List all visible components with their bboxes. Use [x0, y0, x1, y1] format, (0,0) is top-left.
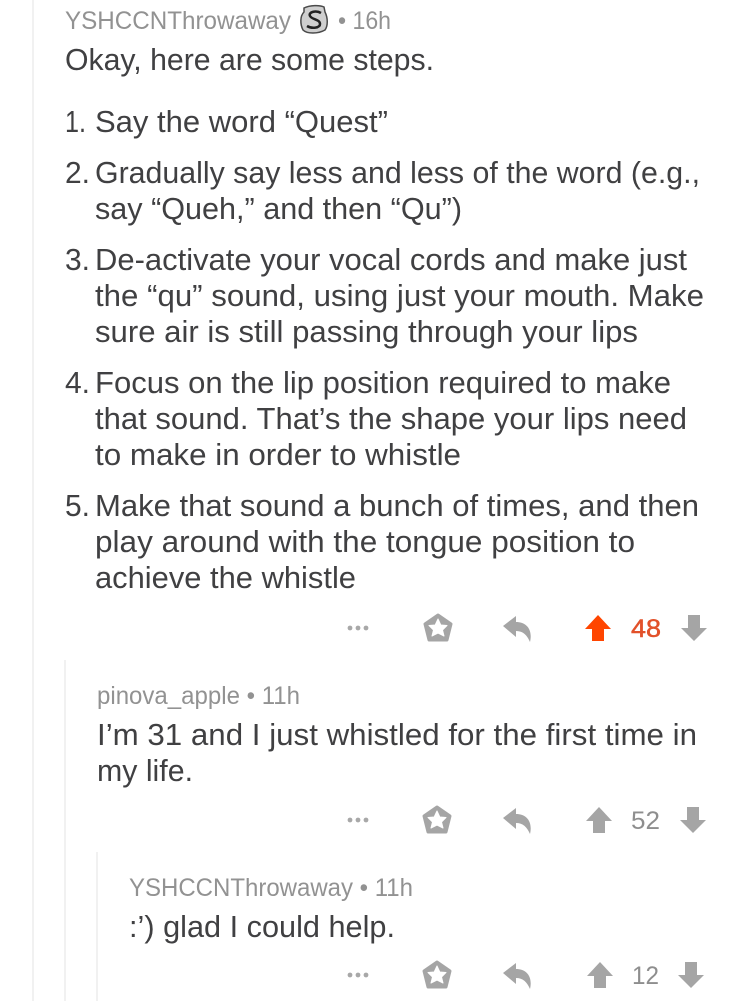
action bar: 48 votes: [348, 615, 707, 643]
thread lines: [32, 0, 98, 1001]
action bar: 52 votes: [348, 807, 706, 835]
step 3: 3.: [65, 242, 90, 277]
step 4: 4.: [65, 365, 90, 400]
action bar: 48 votes: 48: [631, 615, 661, 643]
author line: [65, 6, 391, 35]
step 5: Make that sound a bunch of times, and then: [95, 488, 699, 523]
comment text: I’m 31 and I just whistled for the first time in: [97, 717, 697, 752]
step 1: Say the word “Quest”: [95, 104, 388, 139]
step 3: [65, 242, 704, 349]
action bar: 12 votes: 12: [632, 962, 659, 990]
step 2: [65, 155, 700, 226]
step 5: play around with the tongue position to: [95, 524, 635, 559]
step 2: 2.: [65, 155, 90, 190]
top comment: [65, 6, 707, 643]
step 3: sure air is still passing through your lips: [95, 314, 638, 349]
icon: silver award badge: [301, 6, 327, 33]
step 3: De-activate your vocal cords and make just: [95, 242, 687, 277]
author line: YSHCCNThrowaway • 11h: [129, 874, 413, 902]
author line: pinova_apple • 11h: [97, 682, 300, 710]
intro text: Okay, here are some steps.: [65, 42, 434, 77]
author line: • 16h: [338, 7, 391, 35]
step 4: to make in order to whistle: [95, 437, 461, 472]
comment text: :’) glad I could help.: [129, 909, 395, 944]
comment text: my life.: [97, 753, 193, 788]
step 4: that sound. That’s the shape your lips need: [95, 401, 687, 436]
comment text: [97, 717, 697, 788]
step 1: 1.: [65, 104, 86, 139]
step 5: [65, 488, 699, 595]
step 3: the “qu” sound, using just your mouth. Make: [95, 278, 704, 313]
step 5: 5.: [65, 488, 90, 523]
reply comment: pinova_apple: [97, 682, 706, 835]
action bar: 12 votes: [348, 962, 704, 990]
action bar: 52 votes: 52: [631, 807, 660, 835]
step 2: Gradually say less and less of the word (e.g.,: [95, 155, 700, 190]
step 4: [65, 365, 687, 472]
reply comment: YSHCCNThrowaway: [129, 874, 704, 990]
author line: YSHCCNThrowaway: [65, 7, 291, 35]
step 4: Focus on the lip position required to make: [95, 365, 671, 400]
step 5: achieve the whistle: [95, 560, 356, 595]
step 2: say “Queh,” and then “Qu”): [95, 191, 462, 226]
